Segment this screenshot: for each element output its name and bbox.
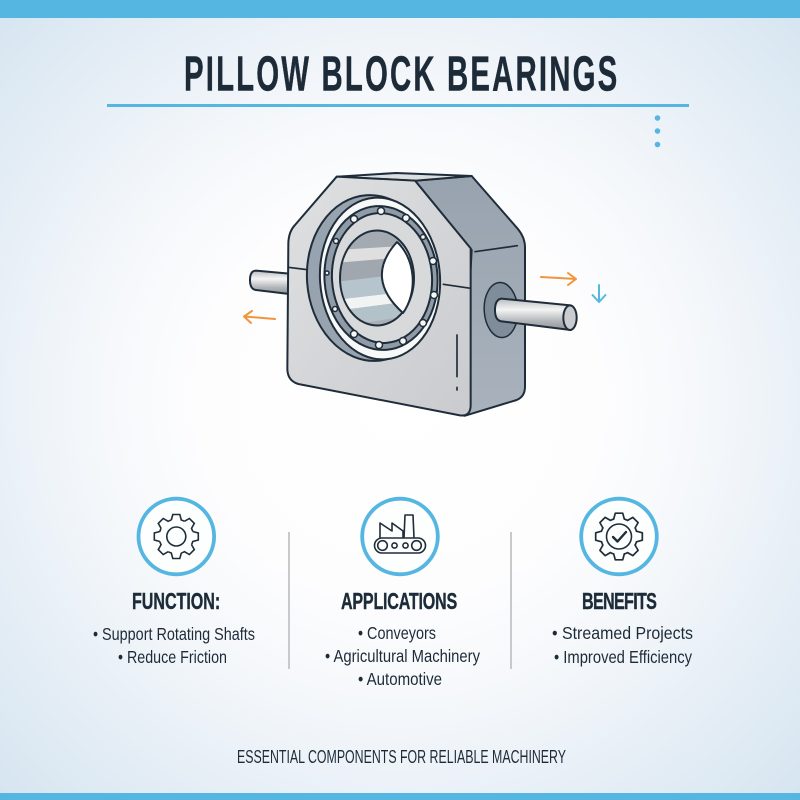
bearing balls xyxy=(325,208,438,348)
list: applications: • Agricultural Machinery xyxy=(325,646,480,666)
list: benefits: • Improved Efficiency xyxy=(554,647,692,667)
arrow: down blue xyxy=(592,285,606,302)
footer tagline: ESSENTIAL COMPONENTS FOR RELIABLE MACHINERY xyxy=(237,746,566,767)
heading: benefits: BENEFITS xyxy=(582,589,657,615)
divider right xyxy=(510,532,512,669)
arrow: right orange xyxy=(541,273,576,285)
title: PILLOW BLOCK BEARINGS xyxy=(184,46,617,101)
list: function: • Reduce Friction xyxy=(118,647,227,667)
right shaft flange xyxy=(483,282,519,338)
housing side face xyxy=(415,176,525,416)
housing seams and slot xyxy=(288,246,517,390)
list: benefits: • Streamed Projects xyxy=(552,623,693,643)
housing front face xyxy=(287,177,471,415)
heading: function: FUNCTION: xyxy=(132,589,220,615)
right shaft xyxy=(495,299,577,330)
icon: factory conveyor xyxy=(362,499,438,574)
title underline xyxy=(107,104,689,107)
heading: applications: APPLICATIONS xyxy=(341,589,457,615)
bearing illustration xyxy=(250,173,577,416)
column: applications xyxy=(325,499,480,689)
bore interior xyxy=(339,230,415,326)
bottom bar xyxy=(0,793,800,800)
list: applications: • Conveyors xyxy=(358,623,436,643)
icon: gear xyxy=(138,499,214,574)
arrow: left orange xyxy=(244,311,275,323)
list: benefits xyxy=(552,623,693,667)
divider left xyxy=(288,532,290,669)
top bar xyxy=(0,0,800,18)
column: benefits xyxy=(552,499,693,667)
icon: gear with check xyxy=(581,499,657,574)
list: function xyxy=(93,624,255,667)
list: applications: • Automotive xyxy=(358,669,442,689)
list: applications xyxy=(325,623,480,689)
housing top face xyxy=(337,173,472,181)
bearing outer ring xyxy=(301,191,446,365)
decorative dots xyxy=(655,115,660,147)
column: function xyxy=(93,499,255,667)
bore opening xyxy=(382,242,413,313)
list: function: • Support Rotating Shafts xyxy=(93,624,255,644)
left shaft xyxy=(250,271,289,294)
